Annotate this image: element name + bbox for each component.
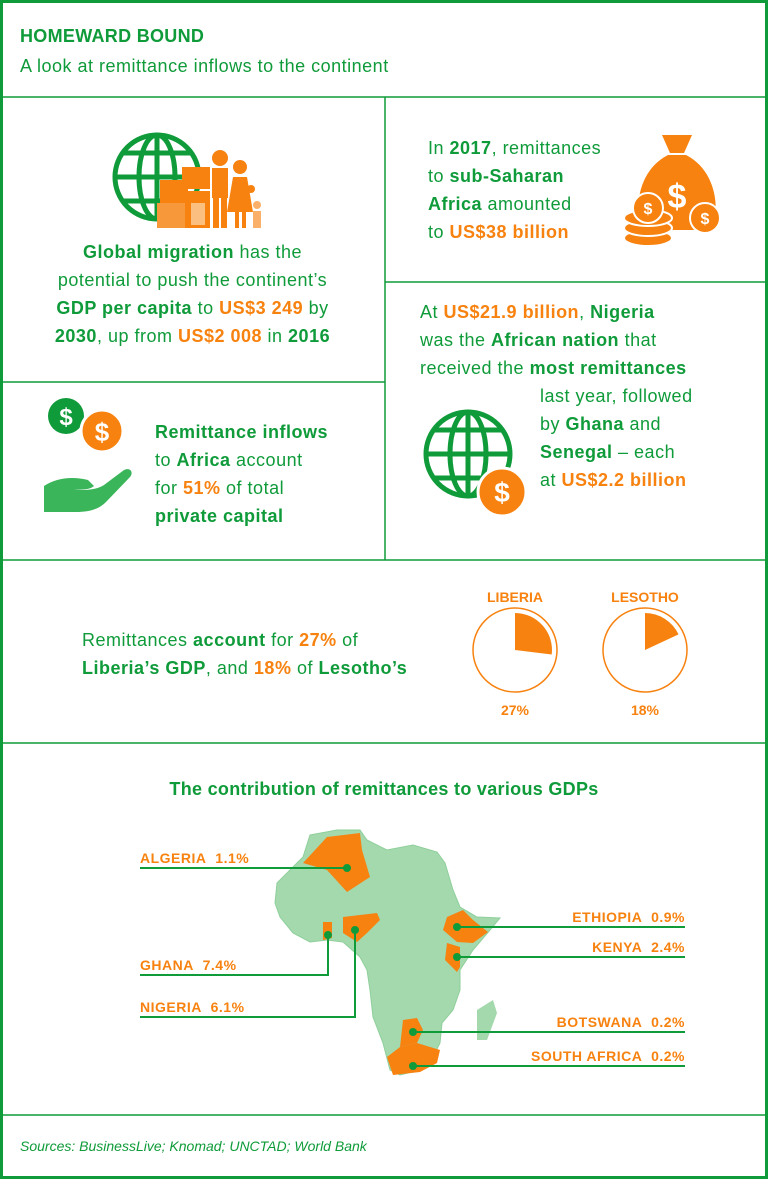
text: Nigeria: received the most remittances <box>420 358 687 378</box>
text: global migration: potential to push the continent’s <box>58 270 327 290</box>
pie charts: LESOTHO <box>611 589 679 605</box>
icon: globe with dollar <box>424 410 524 514</box>
icon: hand with coins: $ <box>59 404 73 431</box>
text: last year, followed <box>540 386 693 406</box>
map of Africa with callouts: SOUTH AFRICA 0.2% <box>531 1048 685 1064</box>
text: Liberia / Lesotho: Remittances account for 27% of <box>82 630 358 650</box>
text: 2017 remittances <box>428 138 601 242</box>
text: Liberia / Lesotho <box>82 630 407 678</box>
icon: hand with coins <box>44 398 132 512</box>
text: global migration: Global migration has the <box>83 242 302 262</box>
text: Nigeria: At US$21.9 billion, Nigeria <box>420 302 655 322</box>
icon: globe with dollar: $ <box>494 477 510 508</box>
icon: money bag with coins: $ <box>701 211 710 228</box>
text: remittance inflows: to Africa account <box>155 450 303 470</box>
icon: globe with migrants <box>112 132 261 228</box>
sources: Sources: BusinessLive; Knomad; UNCTAD; World Bank <box>20 1138 367 1154</box>
pie charts: 18% <box>631 702 660 718</box>
map heading: The contribution of remittances to various GDPs <box>169 779 599 799</box>
map of Africa with callouts: ALGERIA 1.1% <box>140 850 249 866</box>
text: remittance inflows <box>155 422 328 526</box>
text: by Ghana and <box>540 414 661 434</box>
map of Africa with callouts: KENYA 2.4% <box>592 939 685 955</box>
map of Africa with callouts: GHANA 7.4% <box>140 957 237 973</box>
text: 2017 remittances: to sub-Saharan <box>428 166 564 186</box>
text: remittance inflows: Remittance inflows <box>155 422 328 442</box>
text: 2017 remittances: In 2017, remittances <box>428 138 601 158</box>
text: global migration: 2030, up from US$2 008 in 2016 <box>55 326 330 346</box>
text: Senegal – each <box>540 442 675 462</box>
text: global migration <box>55 242 330 346</box>
text: remittance inflows: for 51% of total <box>155 478 284 498</box>
subtitle: A look at remittance inflows to the continent <box>20 56 389 76</box>
text: 2017 remittances: to US$38 billion <box>428 222 569 242</box>
text: 2017 remittances: Africa amounted <box>428 194 572 214</box>
pie charts: LIBERIA <box>487 589 543 605</box>
map of Africa with callouts: BOTSWANA 0.2% <box>557 1014 685 1030</box>
text: at US$2.2 billion <box>540 470 687 490</box>
text: remittance inflows: private capital <box>155 506 284 526</box>
title: HOMEWARD BOUND <box>20 26 204 46</box>
map of Africa with callouts: ETHIOPIA 0.9% <box>572 909 685 925</box>
pie charts: 27% <box>501 702 530 718</box>
text: Nigeria: was the African nation that <box>420 330 657 350</box>
text: Nigeria <box>420 302 687 378</box>
icon: money bag with coins: $ <box>668 178 687 216</box>
pie charts <box>472 589 688 718</box>
icon: hand with coins: $ <box>95 417 110 447</box>
map of Africa with callouts: NIGERIA 6.1% <box>140 999 245 1015</box>
text: global migration: GDP per capita to US$3 249 by <box>56 298 329 318</box>
text: Liberia / Lesotho: Liberia’s GDP, and 18% of Lesotho’s <box>82 658 407 678</box>
icon: money bag with coins <box>625 135 719 245</box>
icon: money bag with coins: $ <box>644 201 653 218</box>
map of Africa with callouts <box>140 830 685 1076</box>
